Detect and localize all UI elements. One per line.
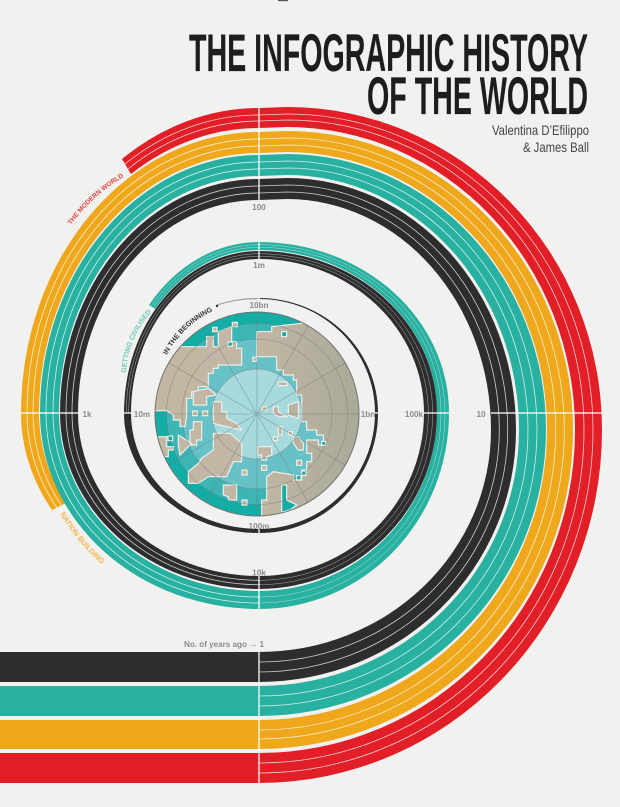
scale axis lines xyxy=(21,108,602,783)
label: in the beginning: IN THE BEGINNING xyxy=(163,308,212,355)
authors: & James Ball xyxy=(523,139,589,155)
scale labels: 10m xyxy=(134,410,150,419)
scale labels: 10 xyxy=(476,410,486,419)
scale labels: 100 xyxy=(252,203,266,212)
scale labels: 100m xyxy=(249,522,269,531)
globe xyxy=(147,312,370,520)
scale labels: 10bn xyxy=(249,301,269,310)
title xyxy=(189,24,588,126)
label: getting civilised: GETTING CIVILISED xyxy=(121,310,150,372)
flat timeline bars xyxy=(0,652,259,783)
band: in the beginning (dark spiral) xyxy=(60,178,516,682)
scale labels: 1m xyxy=(253,261,265,270)
scale labels: 1k xyxy=(82,410,92,419)
scale labels: 10k xyxy=(252,568,266,578)
top edge mark xyxy=(278,0,288,1)
scale labels xyxy=(82,203,486,578)
scale labels: 1bn xyxy=(361,410,375,419)
band: the modern world (red) xyxy=(122,107,602,783)
label: the modern world: THE MODERN WORLD xyxy=(67,174,123,224)
axis caption: No. of years ago → 1 xyxy=(184,639,264,649)
label: nation building: NATION BUILDING xyxy=(60,512,104,564)
authors: Valentina D’Efilippo xyxy=(492,122,589,138)
band: getting civilised (teal) xyxy=(40,154,546,716)
band: nation building (yellow) xyxy=(21,131,573,749)
authors xyxy=(492,122,589,155)
scale labels: 100k xyxy=(405,410,424,419)
start marker dot xyxy=(216,305,218,307)
